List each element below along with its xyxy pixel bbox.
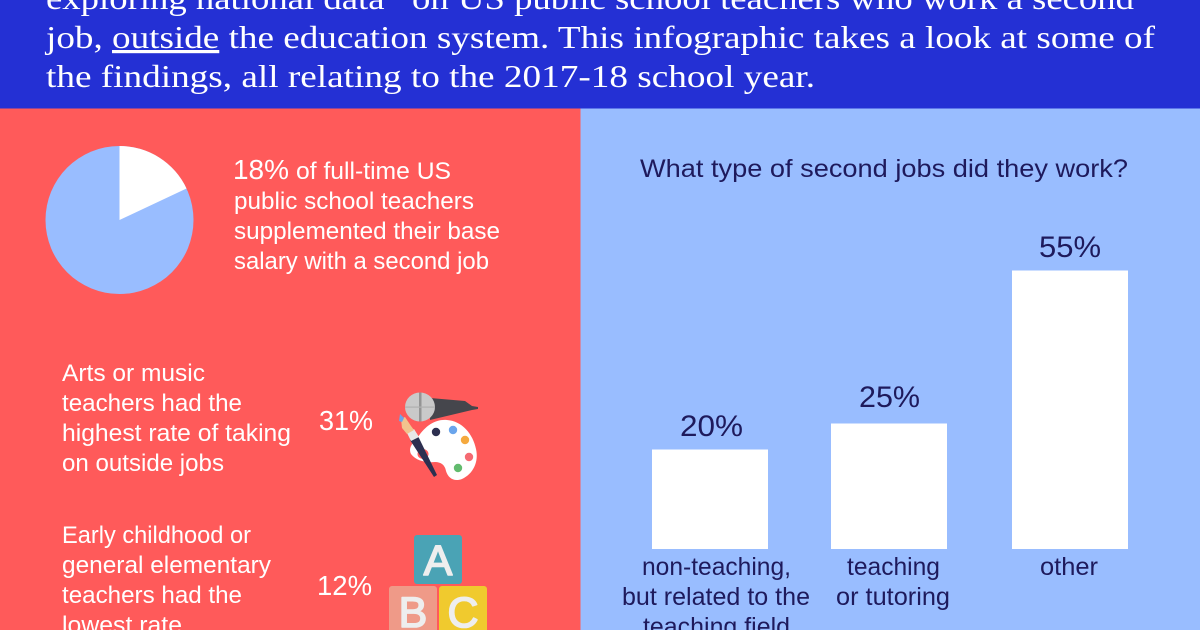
text block: arts or music teachers [62,360,291,477]
text block: 18 percent statistic: public school teachers [234,188,474,215]
panel: second job types [580,108,1200,630]
icon: alphabet blocks [389,535,487,630]
text block: arts or music teachers: on outside jobs [62,450,224,477]
text block: introduction: the findings, all relating to the 2017-18 school year. [46,58,815,94]
label: teaching: or tutoring [836,583,950,611]
text block: arts or music teachers: teachers had the [62,390,242,417]
bar: teaching 25 percent: 25% [859,381,920,414]
label: other: other [1040,553,1098,581]
label: non-teaching [622,553,810,630]
text block: early childhood teachers: Early childhood or [62,522,251,549]
text block: 18 percent statistic: salary with a second job [234,248,489,275]
label: teaching: teaching [847,553,940,581]
bar: non-teaching 20 percent [652,410,768,549]
bar: teaching 25 percent [831,381,947,549]
text block: 18 percent statistic: 18% [233,154,289,185]
pie chart: 18 percent [46,146,194,294]
bar: other 55 percent [1012,231,1128,549]
text block: introduction: job, outside the education system. This infographic takes a look at some of [45,19,1155,55]
icon: microphone [405,392,478,422]
label: teaching [836,553,950,611]
block A: A [424,537,453,585]
icon: palette [410,420,477,480]
icon: microphone and paint palette [399,392,478,480]
text block: early childhood teachers [62,522,272,630]
number: 31 percent: 31% [319,405,373,436]
label: non-teaching: but related to the [622,583,810,611]
text block: early childhood teachers: general elementary [62,552,272,579]
bar: non-teaching 20 percent: 20% [680,410,743,443]
label: non-teaching: non-teaching, [642,553,791,581]
number: 12 percent: 12% [317,570,372,601]
text block: arts or music teachers: highest rate of taking [62,420,291,447]
panel: intro header [0,0,1200,108]
bar chart [622,231,1128,630]
text block: introduction [45,0,1155,94]
text block: 18 percent statistic: supplemented their base [234,218,500,245]
palette thumb hole [418,449,428,459]
text block: early childhood teachers: teachers had the [62,582,242,609]
text block: 18 percent statistic [233,154,500,275]
icon: paint brush [399,414,437,477]
text block: 18 percent statistic: of full-time US [296,158,451,185]
panel: teacher statistics [0,108,580,630]
heading: chart title: What type of second jobs did they work? [640,155,1128,183]
bar: other 55 percent: 55% [1039,231,1101,264]
text block: arts or music teachers: Arts or music [62,360,205,387]
